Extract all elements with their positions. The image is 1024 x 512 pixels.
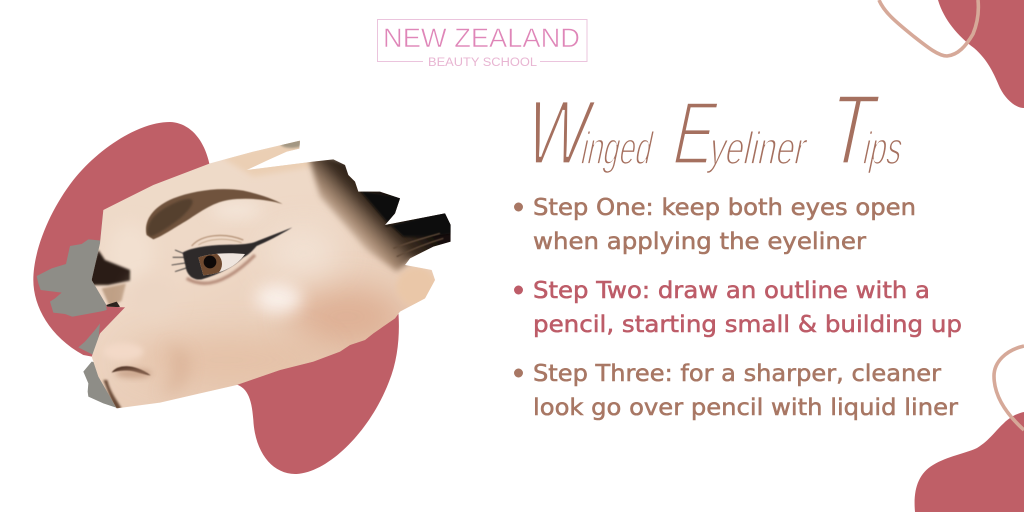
ear — [397, 267, 437, 307]
title: Winged Eyeliner Tips — [517, 74, 918, 186]
step two: pencil, starting small & building up — [533, 310, 962, 338]
upper lip shadow — [103, 380, 122, 410]
far eye shadow — [88, 250, 130, 285]
step one: when applying the eyeliner — [533, 227, 866, 255]
eyeball — [198, 253, 245, 276]
cheek blush — [290, 287, 403, 347]
brow bone highlight — [216, 200, 256, 220]
nose shading — [166, 348, 190, 394]
face skin and features — [92, 140, 451, 408]
title: Winged Eyeliner Tips: T — [819, 74, 886, 186]
cheek highlight — [255, 283, 302, 313]
bullet list: three steps — [514, 193, 962, 421]
eye and brow group, coordinates from detail crop — [146, 189, 292, 283]
eyelid crease — [192, 235, 243, 246]
logo: New Zealand Beauty School: NEW ZEALAND — [383, 23, 580, 53]
step one — [514, 193, 916, 255]
peach forehead strip — [225, 140, 312, 176]
title: Winged Eyeliner Tips: ips — [859, 122, 908, 174]
eyeliner wing — [183, 227, 292, 280]
far eye lashes — [100, 302, 120, 334]
under-eye rim — [187, 255, 255, 283]
logo: New Zealand Beauty School: BEAUTY SCHOOL — [428, 57, 538, 69]
logo: New Zealand Beauty School — [378, 20, 587, 69]
eyebrow — [146, 189, 283, 239]
step one: Step One: keep both eyes open — [533, 193, 916, 221]
title: Winged Eyeliner Tips: E — [665, 84, 726, 184]
hair — [306, 159, 451, 274]
title: Winged Eyeliner Tips: inged — [577, 122, 666, 174]
title: Winged Eyeliner Tips: W — [517, 81, 601, 184]
pink blob behind face — [33, 122, 399, 474]
decorative blob: bottom right — [915, 346, 1024, 512]
pink sliver beside nose — [55, 307, 125, 343]
nostril — [112, 366, 151, 375]
step three — [514, 359, 958, 421]
step two — [514, 276, 962, 338]
decorative blob: top right — [879, 0, 1024, 108]
step three: look go over pencil with liquid liner — [533, 393, 958, 421]
title: Winged Eyeliner Tips: yeliner — [705, 122, 821, 174]
grey photo background patches — [37, 210, 120, 408]
eyelashes — [172, 250, 188, 272]
collage: face over pink blob — [33, 122, 470, 474]
step three: Step Three: for a sharper, cleaner — [533, 359, 941, 387]
step two: Step Two: draw an outline with a — [533, 276, 930, 304]
